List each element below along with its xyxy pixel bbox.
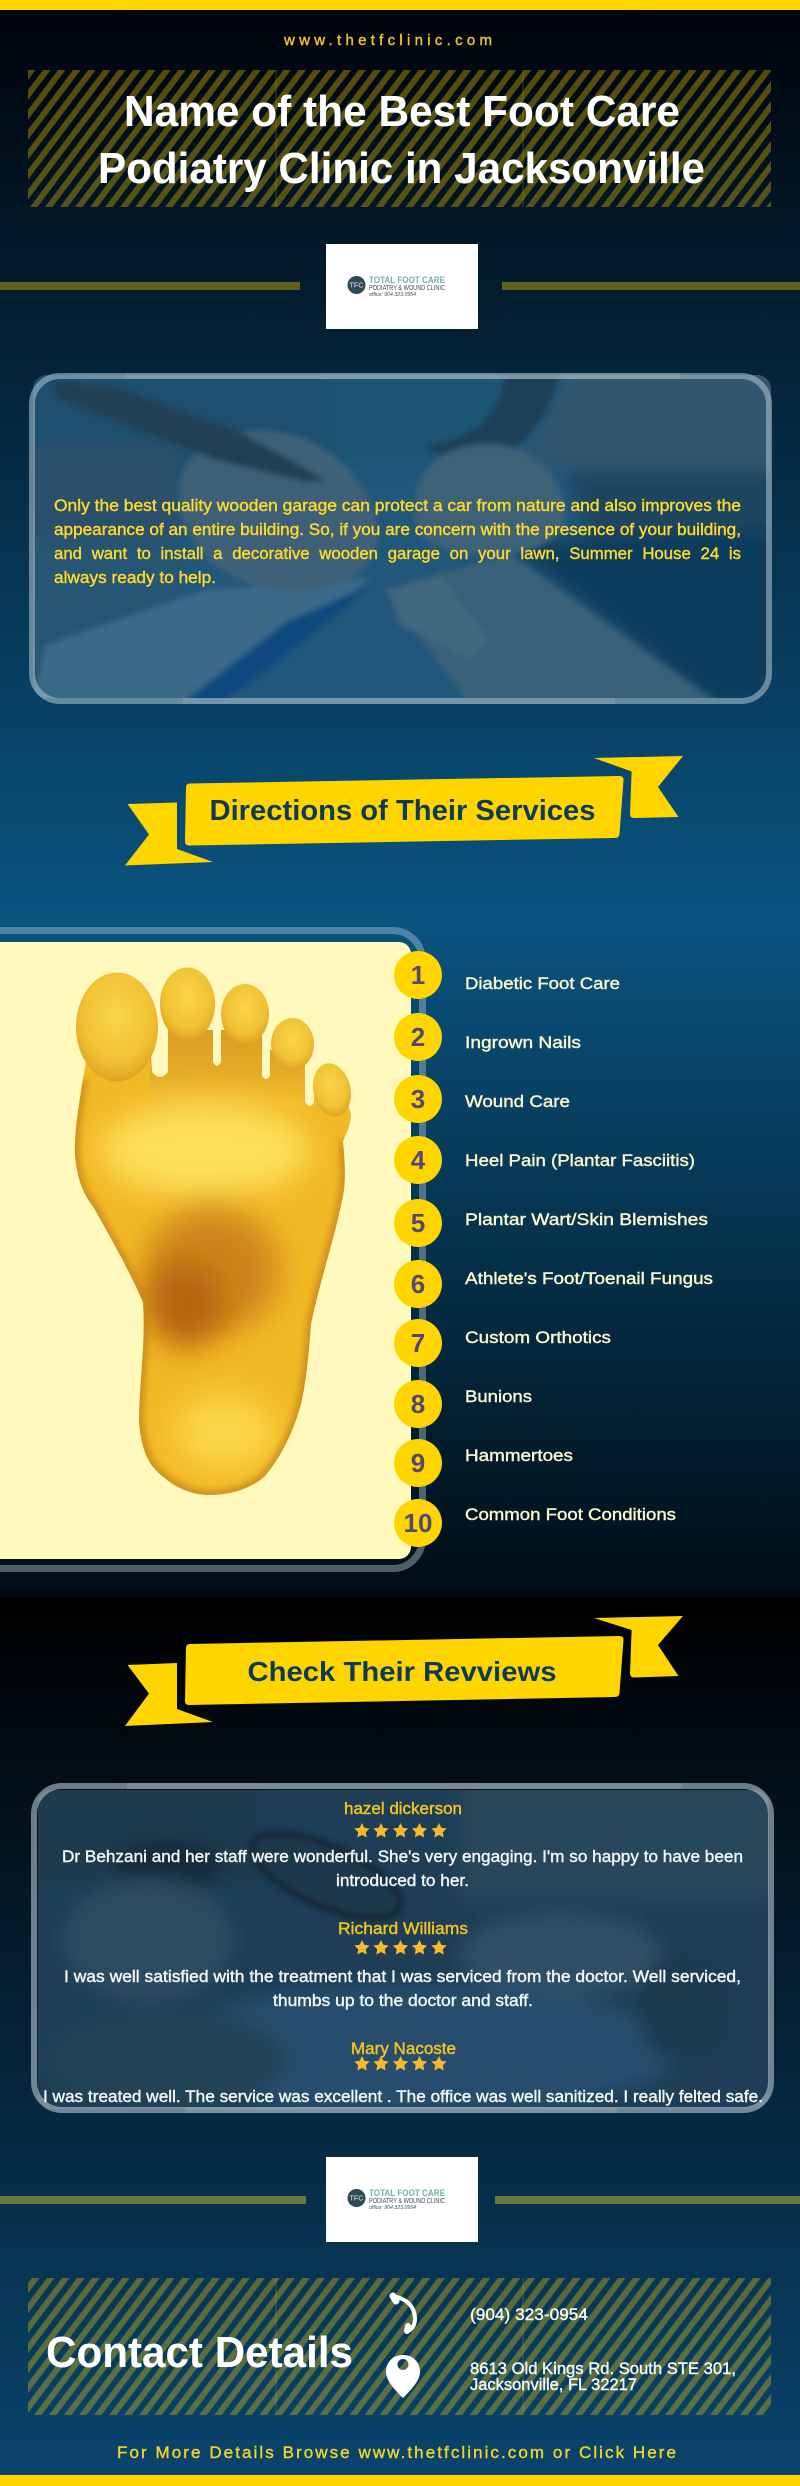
fourth toe [271,1018,314,1070]
title banner [28,70,771,207]
numbers: 5 [411,1208,425,1238]
icon: foot sole [74,968,351,1495]
bottom yellow bar [0,2475,800,2486]
ribbon: reviews heading [125,1616,683,1726]
logo bottom: TOTAL FOOT CARE [369,2188,445,2199]
logo top: TFC [350,282,364,290]
services list: Custom Orthotics [465,1328,611,1347]
address [470,2359,736,2394]
services list: Plantar Wart/Skin Blemishes [465,1210,708,1229]
phone number: (904) 323-0954 [470,2305,588,2324]
divider left lower [0,2196,306,2204]
second toe [160,968,215,1040]
divider left [0,282,300,290]
review 2: thumbs up to the doctor and staff. [273,1992,533,2010]
intro paragraph: appearance of an entire building. So, if you are concern with the presence of your building, [54,521,741,539]
panel: intro [20,360,790,710]
icon: location pin [386,2355,420,2398]
services list: Heel Pain (Plantar Fasciitis) [465,1151,695,1170]
photo: doctor examining foot with magnifier [30,1780,780,2115]
numbers: 6 [411,1269,425,1299]
title line 1: Name of the Best Foot Care [124,87,680,136]
icon: phone [393,2296,415,2331]
logo top: PODIATRY & WOUND CLINIC [369,285,445,292]
third toe [221,984,269,1044]
intro paragraph [54,497,741,587]
divider right [502,282,800,290]
services list: Diabetic Foot Care [465,974,620,993]
contact banner [28,2278,771,2415]
numbers [404,960,432,1538]
rounded glass border [32,376,769,701]
logo bottom: PODIATRY & WOUND CLINIC [369,2198,445,2205]
big toe [76,972,158,1082]
address: Jacksonville, FL 32217 [470,2375,637,2394]
services list: Athlete's Foot/Toenail Fungus [465,1269,713,1288]
logo top [326,244,478,329]
services list [465,974,713,1524]
review 3: I was treated well. The service was excellent . The office was well sanitized. I really felted safe. [43,2088,763,2106]
services list: Hammertoes [465,1446,573,1465]
review 2: I was well satisfied with the treatment that I was serviced from the doctor. Well serviced, [64,1968,741,1986]
numbers: 3 [411,1084,425,1114]
review 3 [43,2040,763,2106]
logo bottom: TFC [350,2196,364,2202]
numbers: 7 [411,1328,425,1358]
address: 8613 Old Kings Rd. South STE 301, [470,2359,736,2378]
services list: Wound Care [465,1092,570,1111]
number circles [394,951,442,1547]
intro paragraph: always ready to help. [54,569,216,587]
review 1 [62,1800,743,1890]
photo: podiatrist treating a foot [33,375,771,698]
numbers: 1 [411,960,425,990]
ribbon: services heading [125,756,683,866]
intro paragraph: and want to install a decorative wooden garage on your lawn, Summer House 24 is [54,545,741,563]
panel: foot illustration [0,930,422,1568]
heading text: Check Their Revviews [248,1656,556,1687]
numbers: 9 [411,1448,425,1478]
services list: Bunions [465,1387,532,1406]
contact heading: Contact Details [46,2328,353,2377]
little toe [308,1060,356,1120]
footer call to action: For More Details Browse www.thetfclinic.com or Click Here [117,2443,676,2462]
services list: Ingrown Nails [465,1033,581,1052]
review 2: Richard Williams [338,1920,468,1938]
top yellow bar [0,0,800,10]
numbers: 2 [411,1022,425,1052]
intro paragraph: Only the best quality wooden garage can protect a car from nature and also improves the [54,497,741,515]
numbers: 4 [411,1145,426,1175]
numbers: 8 [411,1389,425,1419]
website address: www.thetfclinic.com [283,32,492,49]
rounded glass border [34,1786,771,2110]
panel: reviews [30,1780,780,2115]
logo bottom: office: 904.323.0954 [369,2205,416,2211]
logo bottom [326,2157,478,2242]
logo top: TOTAL FOOT CARE [369,275,445,286]
logo top: office: 904.323.0954 [369,292,416,298]
review 1: Dr Behzani and her staff were wonderful. She's very engaging. I'm so happy to have been [62,1848,743,1866]
review 2 [64,1920,741,2010]
divider right lower [495,2196,800,2204]
numbers: 10 [404,1508,432,1538]
review 1: introduced to her. [336,1872,469,1890]
review 1: hazel dickerson [344,1800,462,1818]
heading text: Directions of Their Services [210,795,596,827]
review 3: Mary Nacoste [351,2040,456,2058]
services list: Common Foot Conditions [465,1505,676,1524]
title line 2: Podiatry Clinic in Jacksonville [98,144,705,193]
